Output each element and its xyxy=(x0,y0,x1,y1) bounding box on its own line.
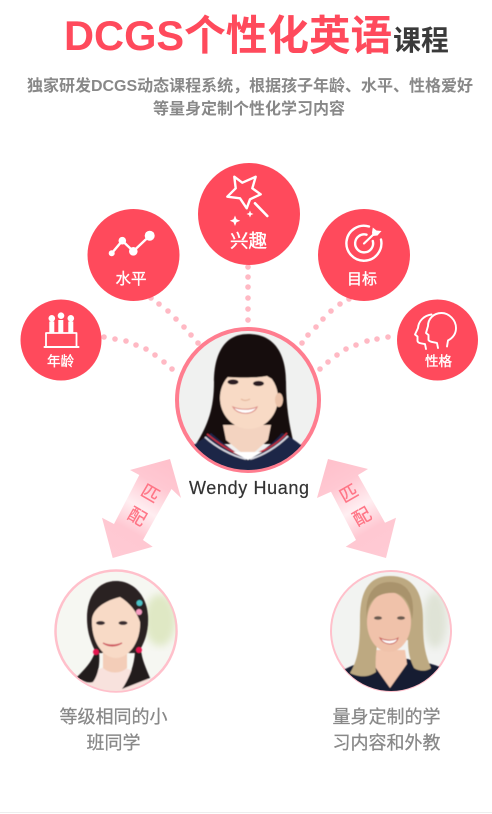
dotted connector: level xyxy=(148,295,201,346)
caption: teacher: 量身定制的学 xyxy=(332,707,440,727)
photo: classmate girl xyxy=(56,570,176,700)
caption: classmates: 班同学 xyxy=(86,733,140,753)
label: match left xyxy=(124,481,163,530)
badge: level xyxy=(88,209,180,301)
label: match left: 匹 xyxy=(137,481,163,507)
icon: line chart xyxy=(109,231,155,256)
subtitle xyxy=(27,76,473,118)
badge: interest xyxy=(198,163,300,265)
caption: teacher xyxy=(332,707,440,753)
title: DCGS个性化英语课程 xyxy=(64,12,449,59)
badge: interest: 兴趣 xyxy=(230,230,267,252)
subtitle: 等量身定制个性化学习内容 xyxy=(153,99,345,118)
subtitle: 独家研发DCGS动态课程系统，根据孩子年龄、水平、性格爱好 xyxy=(27,76,473,95)
icon: star wand xyxy=(227,177,267,226)
icon: target with arrow xyxy=(346,226,382,261)
name label: Wendy Huang xyxy=(189,478,309,498)
arrow: right match xyxy=(317,459,396,558)
caption: classmates: 等级相同的小 xyxy=(60,707,168,727)
caption: teacher: 习内容和外教 xyxy=(332,733,440,753)
dotted connector: age xyxy=(101,334,175,372)
dotted connector: personality xyxy=(317,334,391,372)
label: match right xyxy=(336,481,375,530)
arrow: left match xyxy=(102,459,181,558)
dotted connector: goal xyxy=(299,296,352,346)
icon: two head profiles xyxy=(415,313,456,349)
badge: age xyxy=(20,300,102,380)
label: match right: 配 xyxy=(349,504,375,530)
label: match right: 匹 xyxy=(336,481,362,507)
photo: Wendy Huang portrait xyxy=(177,329,319,476)
label: match left: 配 xyxy=(124,504,150,530)
badge: personality xyxy=(397,300,478,380)
badge: level: 水平 xyxy=(115,270,147,288)
icon: birthday cake xyxy=(44,312,78,347)
photo: foreign teacher xyxy=(331,571,451,700)
dotted connector: interest xyxy=(245,264,251,323)
badge: goal xyxy=(318,209,410,301)
caption: classmates xyxy=(60,707,168,753)
badge: goal: 目标 xyxy=(347,271,377,288)
badge: personality: 性格 xyxy=(425,354,452,369)
badge: age: 年龄 xyxy=(47,354,74,369)
